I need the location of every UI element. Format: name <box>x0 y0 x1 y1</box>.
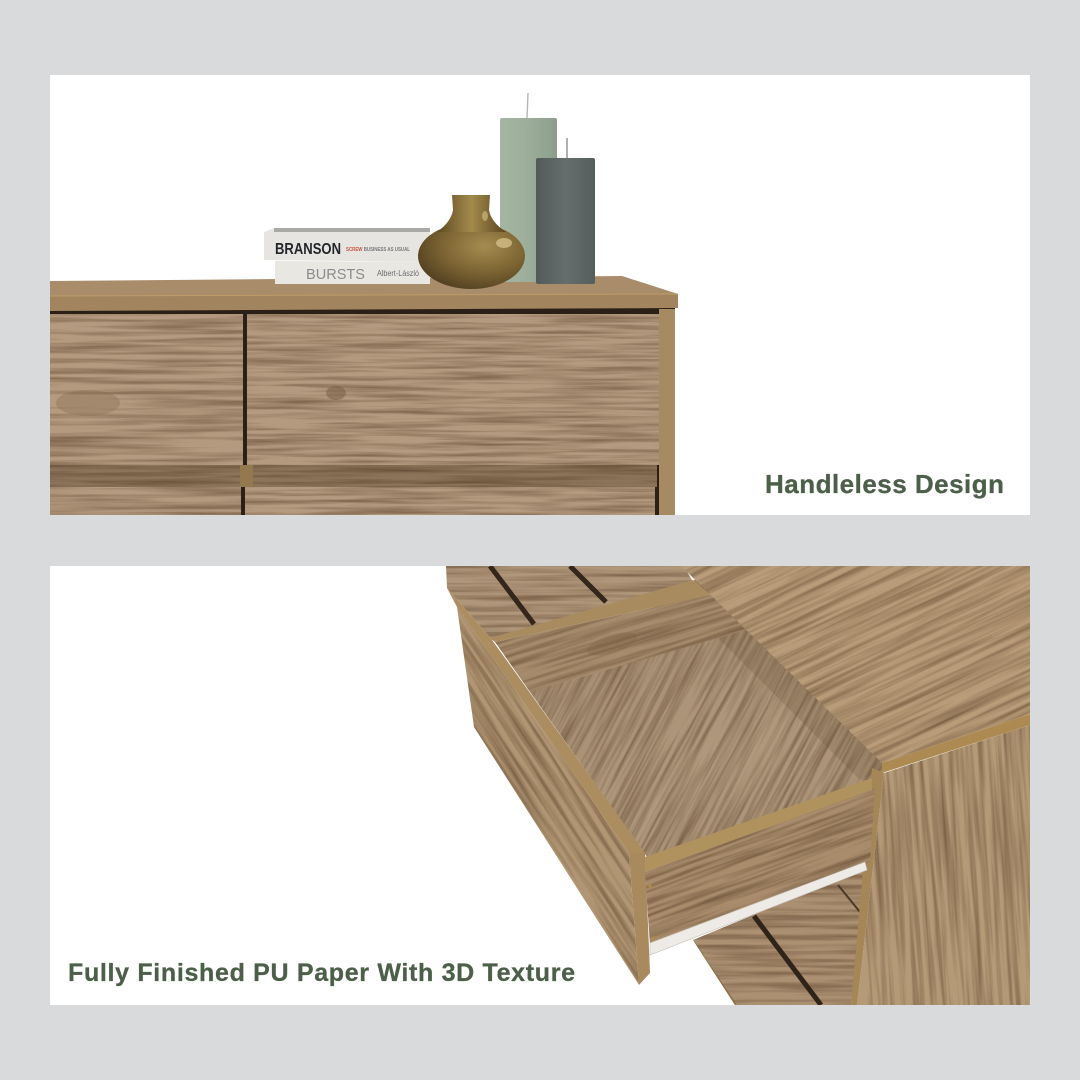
books: SCREW BUSINESS AS USUAL <box>346 247 410 253</box>
cabinet side <box>857 725 1030 1005</box>
panel: fully finished PU paper <box>50 566 1030 1005</box>
drawer floor <box>530 580 888 856</box>
cabinet fronts behind drawer <box>446 566 692 640</box>
infographic canvas <box>50 75 1030 1005</box>
books <box>264 228 430 284</box>
open drawer photo <box>446 566 1030 1005</box>
candle: grey <box>536 138 595 284</box>
books: BRANSON <box>275 241 341 258</box>
books: Albert-László <box>377 269 419 278</box>
candle: sage green <box>500 93 557 282</box>
drawer back wall <box>495 596 746 692</box>
label: handleless design: Handleless Design <box>765 469 1004 499</box>
drawer side wall <box>645 788 875 944</box>
drawer runner <box>650 862 867 955</box>
cabinet top <box>682 566 1030 763</box>
drawer front panel <box>457 607 639 985</box>
sideboard close-up <box>50 276 678 515</box>
panel: handleless design <box>50 75 1030 515</box>
label: PU paper texture: Fully Finished PU Paper With 3D Texture <box>68 959 575 987</box>
brass vase <box>418 195 525 289</box>
lower cabinet fronts <box>693 872 863 1005</box>
books: BURSTS <box>306 266 365 283</box>
